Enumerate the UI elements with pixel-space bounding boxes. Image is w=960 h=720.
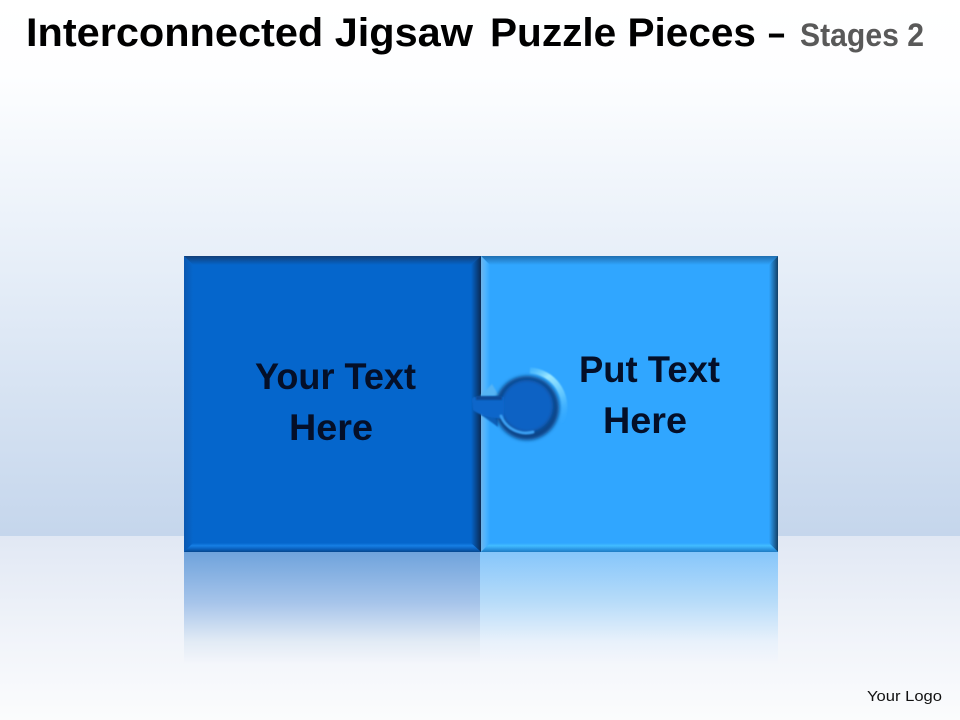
text: your text here: Your Text xyxy=(255,356,416,397)
title: Puzzle Pieces xyxy=(490,11,756,55)
text: put text here: Here xyxy=(603,400,687,441)
text: your text here: Here xyxy=(289,407,373,448)
title: – xyxy=(768,11,785,55)
background floor xyxy=(0,536,960,720)
logo placeholder: Your Logo xyxy=(867,688,942,705)
puzzle connector knob xyxy=(472,370,564,440)
puzzle piece: right light blue xyxy=(481,256,778,552)
title: Stages 2 xyxy=(800,17,924,53)
title xyxy=(26,11,924,55)
background wall xyxy=(0,0,960,536)
title: Interconnected Jigsaw xyxy=(26,11,474,55)
reflection of puzzle pieces xyxy=(184,552,778,664)
text: your text here xyxy=(255,356,416,448)
puzzle piece: left dark blue xyxy=(184,256,481,552)
text: put text here xyxy=(579,349,720,441)
text: put text here: Put Text xyxy=(579,349,720,390)
